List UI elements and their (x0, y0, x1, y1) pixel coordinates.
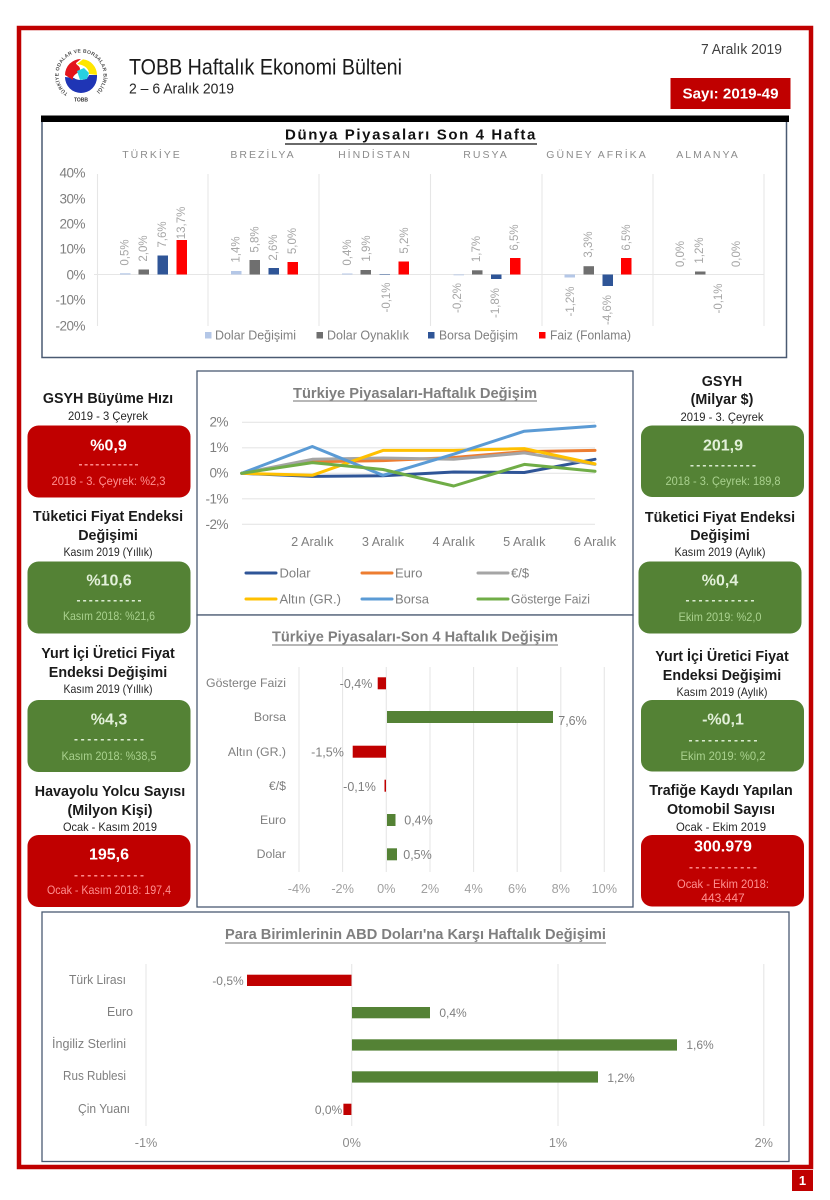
heading: GDP (680, 374, 764, 424)
x axis labels (288, 882, 617, 896)
panel: weekly change line chart (197, 371, 633, 615)
card: car registrations: ----------- (689, 860, 757, 874)
data labels: 1,6% (686, 1038, 714, 1052)
heading: PPI monthly: Endeksi Değişimi (663, 668, 781, 684)
card: GDP: 201,9 (703, 438, 743, 454)
page number (792, 1170, 813, 1191)
legend: Borsa (395, 592, 430, 606)
x axis labels: 5 Aralık (503, 535, 546, 549)
data labels: -4,6% (602, 295, 614, 325)
icon: TOBB logo: TÜRKİYE ODALAR VE BORSALAR BİRLİĞİ (55, 49, 108, 96)
heading: Türkiye Piyasaları-Haftalık Değişim (293, 385, 537, 402)
data labels: -0,1% (381, 282, 393, 313)
data labels: 0,4% (342, 239, 354, 266)
category labels (206, 676, 286, 861)
y axis labels (55, 166, 85, 334)
header (55, 42, 790, 109)
card: air passengers (28, 835, 190, 907)
y axis labels: -10% (55, 292, 85, 308)
x axis labels: 2 Aralık (291, 535, 334, 549)
y axis labels: 40% (59, 166, 85, 180)
country labels: TÜRKİYE (122, 148, 182, 161)
heading: Türkiye Piyasaları-Son 4 Haftalık Değişim (272, 628, 558, 646)
heading: CPI annual: Değişimi (78, 528, 138, 544)
heading: Dünya Piyasaları Son 4 Hafta (285, 126, 537, 144)
category labels: Türk Lirası (69, 973, 126, 987)
data labels: 0,0% (315, 1103, 343, 1117)
y axis labels: -20% (55, 318, 85, 334)
heading: CPI monthly: Tüketici Fiyat Endeksi (645, 510, 795, 526)
data labels: 5,8% (250, 226, 262, 253)
x axis labels: -1% (135, 1136, 157, 1150)
y axis labels: -1% (205, 492, 228, 506)
country labels: HİNDİSTAN (338, 148, 412, 161)
legend: Dolar Oynaklık (327, 328, 409, 342)
legend: €/$ (511, 566, 530, 580)
x axis labels: 4% (464, 882, 483, 896)
x axis labels: 4 Aralık (433, 535, 476, 549)
panel: four-week change bar chart (197, 615, 633, 907)
data labels: 0,5% (120, 239, 132, 266)
data labels: 1,2% (694, 237, 706, 264)
data labels: -0,1% (343, 780, 376, 794)
heading: air passengers: Ocak - Kasım 2019 (63, 820, 157, 834)
data labels: 13,7% (176, 207, 188, 239)
data labels: 5,0% (287, 228, 299, 254)
line chart (242, 426, 595, 486)
heading: car registrations: Ocak - Ekim 2019 (676, 820, 766, 834)
date: 7 Aralık 2019 (701, 42, 782, 58)
heading: PPI annual: Kasım 2019 (Yıllık) (64, 682, 152, 696)
data labels (212, 974, 714, 1117)
issue badge (670, 78, 790, 109)
heading: PPI annual: Endeksi Değişimi (49, 665, 167, 681)
bars (247, 975, 677, 1115)
card: GDP (641, 426, 804, 497)
category labels: Euro (260, 813, 286, 827)
card: PPI monthly: -%0,1 (702, 712, 744, 728)
data labels: 1,7% (471, 236, 483, 262)
data labels: -1,5% (311, 746, 344, 760)
heading: Para Birimlerinin ABD Doları'na Karşı Haftalık Değişimi (225, 926, 606, 943)
x axis labels: 0% (343, 1136, 361, 1150)
heading: PPI monthly (655, 648, 789, 699)
card: air passengers: Ocak - Kasım 2018: 197,4 (47, 883, 171, 897)
y axis labels: -2% (205, 517, 228, 532)
country labels (122, 148, 740, 161)
country labels: ALMANYA (676, 149, 740, 161)
card: CPI monthly: Ekim 2019: %2,0 (678, 610, 762, 624)
x axis labels: 6% (508, 882, 526, 896)
card: PPI annual: %4,3 (91, 712, 127, 728)
data labels: -0,4% (340, 677, 372, 691)
heading: GDP: 2019 - 3. Çeyrek (680, 410, 764, 424)
legend: Gösterge Faizi (511, 592, 590, 606)
data labels: 2,0% (138, 235, 150, 262)
card: CPI annual: %10,6 (86, 572, 132, 590)
x axis labels: 10% (592, 882, 617, 896)
category labels: Dolar (257, 847, 286, 861)
heading: air passengers: Havayolu Yolcu Sayısı (35, 784, 185, 800)
page number: 1 (799, 1173, 806, 1188)
category labels: Rus Rublesi (63, 1069, 126, 1083)
title: TOBB Haftalık Ekonomi Bülteni (129, 54, 402, 80)
subtitle: 2 – 6 Aralık 2019 (129, 80, 234, 98)
card: CPI monthly: %0,4 (702, 572, 738, 590)
data labels: -1,8% (490, 288, 502, 318)
data labels: 3,3% (583, 231, 595, 258)
legend (205, 328, 631, 342)
card: GSYH growth (28, 426, 190, 498)
card: CPI monthly: ----------- (686, 593, 754, 607)
x axis labels: 1% (549, 1136, 567, 1150)
x axis labels: 0% (377, 882, 395, 896)
issue badge: Sayı: 2019-49 (682, 86, 778, 102)
icon: TOBB logo: TOBB (74, 98, 88, 104)
card: GSYH growth: 2018 - 3. Çeyrek: %2,3 (52, 474, 166, 488)
data labels: -1,2% (565, 286, 577, 317)
y axis labels: 10% (59, 242, 85, 256)
card: CPI monthly (638, 562, 802, 634)
x axis labels: 8% (552, 882, 570, 896)
panel: currencies bar chart (42, 912, 789, 1162)
x axis labels: -4% (288, 882, 310, 896)
heading: PPI monthly: Kasım 2019 (Aylık) (676, 685, 768, 699)
panel: world markets (41, 116, 789, 358)
country labels: GÜNEY AFRİKA (546, 148, 648, 161)
data labels: 6,5% (621, 224, 633, 251)
data labels: 2,6% (268, 234, 280, 261)
card: CPI annual: Kasım 2018: %21,6 (63, 609, 155, 623)
card: PPI monthly: Ekim 2019: %0,2 (680, 749, 766, 763)
category labels: Borsa (254, 710, 286, 724)
legend: Dolar Değişimi (215, 328, 296, 342)
data labels: 0,0% (675, 241, 687, 267)
heading: air passengers: (Milyon Kişi) (68, 803, 153, 819)
country labels: BREZİLYA (230, 148, 296, 161)
data labels: 0,4% (439, 1006, 467, 1020)
card: car registrations: 300.979 (694, 838, 752, 856)
card: PPI annual (28, 700, 190, 772)
x axis labels: 6 Aralık (574, 535, 617, 549)
card: GDP: ----------- (690, 458, 756, 472)
card: car registrations (641, 835, 804, 906)
heading: car registrations (649, 783, 793, 834)
heading: GSYH Büyüme Hızı: GSYH Büyüme Hızı (43, 391, 173, 407)
x axis labels: 3 Aralık (362, 535, 405, 549)
data labels (120, 207, 743, 325)
heading: GDP: GSYH (702, 374, 742, 390)
heading: CPI monthly: Değişimi (690, 528, 750, 544)
heading: air passengers (35, 784, 185, 834)
heading: GDP: (Milyar $) (691, 392, 754, 408)
card: CPI annual: ----------- (76, 593, 142, 607)
data labels: 5,2% (399, 227, 411, 254)
card: air passengers: ----------- (74, 868, 144, 882)
heading: car registrations: Trafiğe Kaydı Yapılan (649, 783, 793, 799)
heading: car registrations: Otomobil Sayısı (667, 802, 775, 818)
heading: PPI annual: Yurt İçi Üretici Fiyat (41, 645, 175, 662)
y axis labels: 0% (66, 268, 85, 282)
card: GDP: 2018 - 3. Çeyrek: 189,8 (666, 474, 781, 488)
heading: CPI annual: Tüketici Fiyat Endeksi (33, 509, 183, 525)
legend: Dolar (280, 566, 311, 580)
heading: GSYH Büyüme Hızı: 2019 - 3 Çeyrek (68, 409, 149, 423)
x axis labels (135, 1136, 773, 1150)
category labels: Altın (GR.) (228, 745, 286, 759)
x axis labels: 2% (755, 1136, 773, 1150)
category labels: €/$ (269, 779, 286, 793)
data labels: 0,4% (404, 814, 433, 828)
card: PPI annual: Kasım 2018: %38,5 (62, 749, 157, 763)
bars (353, 677, 553, 860)
card: car registrations: Ocak - Ekim 2018: (677, 877, 769, 891)
card: PPI monthly: ----------- (688, 733, 758, 747)
heading: CPI annual (33, 509, 183, 559)
category labels (52, 973, 133, 1116)
card: PPI monthly (641, 700, 804, 772)
data labels: -0,2% (452, 283, 464, 313)
y axis labels: 30% (59, 192, 85, 206)
card: air passengers: 195,6 (89, 846, 129, 864)
heading: PPI annual (41, 645, 175, 696)
data labels: -0,5% (212, 974, 244, 988)
legend: Borsa Değişim (439, 328, 518, 342)
bar chart: country bars (120, 240, 706, 286)
data labels: 0,5% (403, 848, 432, 862)
y axis labels: 0% (209, 466, 228, 480)
x axis labels: 2% (421, 882, 439, 896)
data labels: 1,9% (361, 235, 373, 262)
x axis labels (291, 535, 617, 549)
y axis labels: 2% (209, 414, 228, 430)
data labels: 0,0% (731, 241, 743, 267)
data labels: 7,6% (558, 714, 587, 728)
card: PPI annual: ----------- (74, 732, 144, 746)
legend: Altın (GR.) (280, 592, 341, 606)
y axis labels: 20% (59, 216, 85, 232)
heading: CPI monthly (645, 510, 795, 559)
card: GSYH growth: %0,9 (90, 438, 127, 454)
category labels: Çin Yuanı (78, 1102, 130, 1116)
category labels: İngiliz Sterlini (52, 1037, 126, 1051)
heading: CPI monthly: Kasım 2019 (Aylık) (674, 545, 766, 559)
card: car registrations: 443.447 (701, 891, 745, 905)
country labels: RUSYA (463, 149, 509, 161)
heading: PPI monthly: Yurt İçi Üretici Fiyat (655, 648, 789, 665)
data labels: 1,2% (607, 1071, 635, 1085)
data labels: 1,4% (230, 236, 242, 263)
legend: Faiz (Fonlama) (550, 328, 631, 342)
x axis labels: -2% (331, 882, 354, 896)
category labels: Euro (107, 1005, 133, 1019)
card: CPI annual (28, 562, 190, 634)
legend (246, 566, 590, 606)
data labels: 6,5% (509, 224, 521, 251)
data labels: 7,6% (157, 221, 169, 248)
heading: CPI annual: Kasım 2019 (Yıllık) (64, 545, 152, 559)
data labels: -0,1% (713, 283, 725, 314)
y axis labels (205, 414, 228, 532)
data labels (311, 677, 587, 862)
card: GSYH growth: ----------- (78, 457, 138, 471)
legend: Euro (395, 566, 422, 580)
category labels: Gösterge Faizi (206, 676, 286, 690)
y axis labels: 1% (209, 440, 228, 455)
heading: GSYH Büyüme Hızı (43, 391, 173, 423)
